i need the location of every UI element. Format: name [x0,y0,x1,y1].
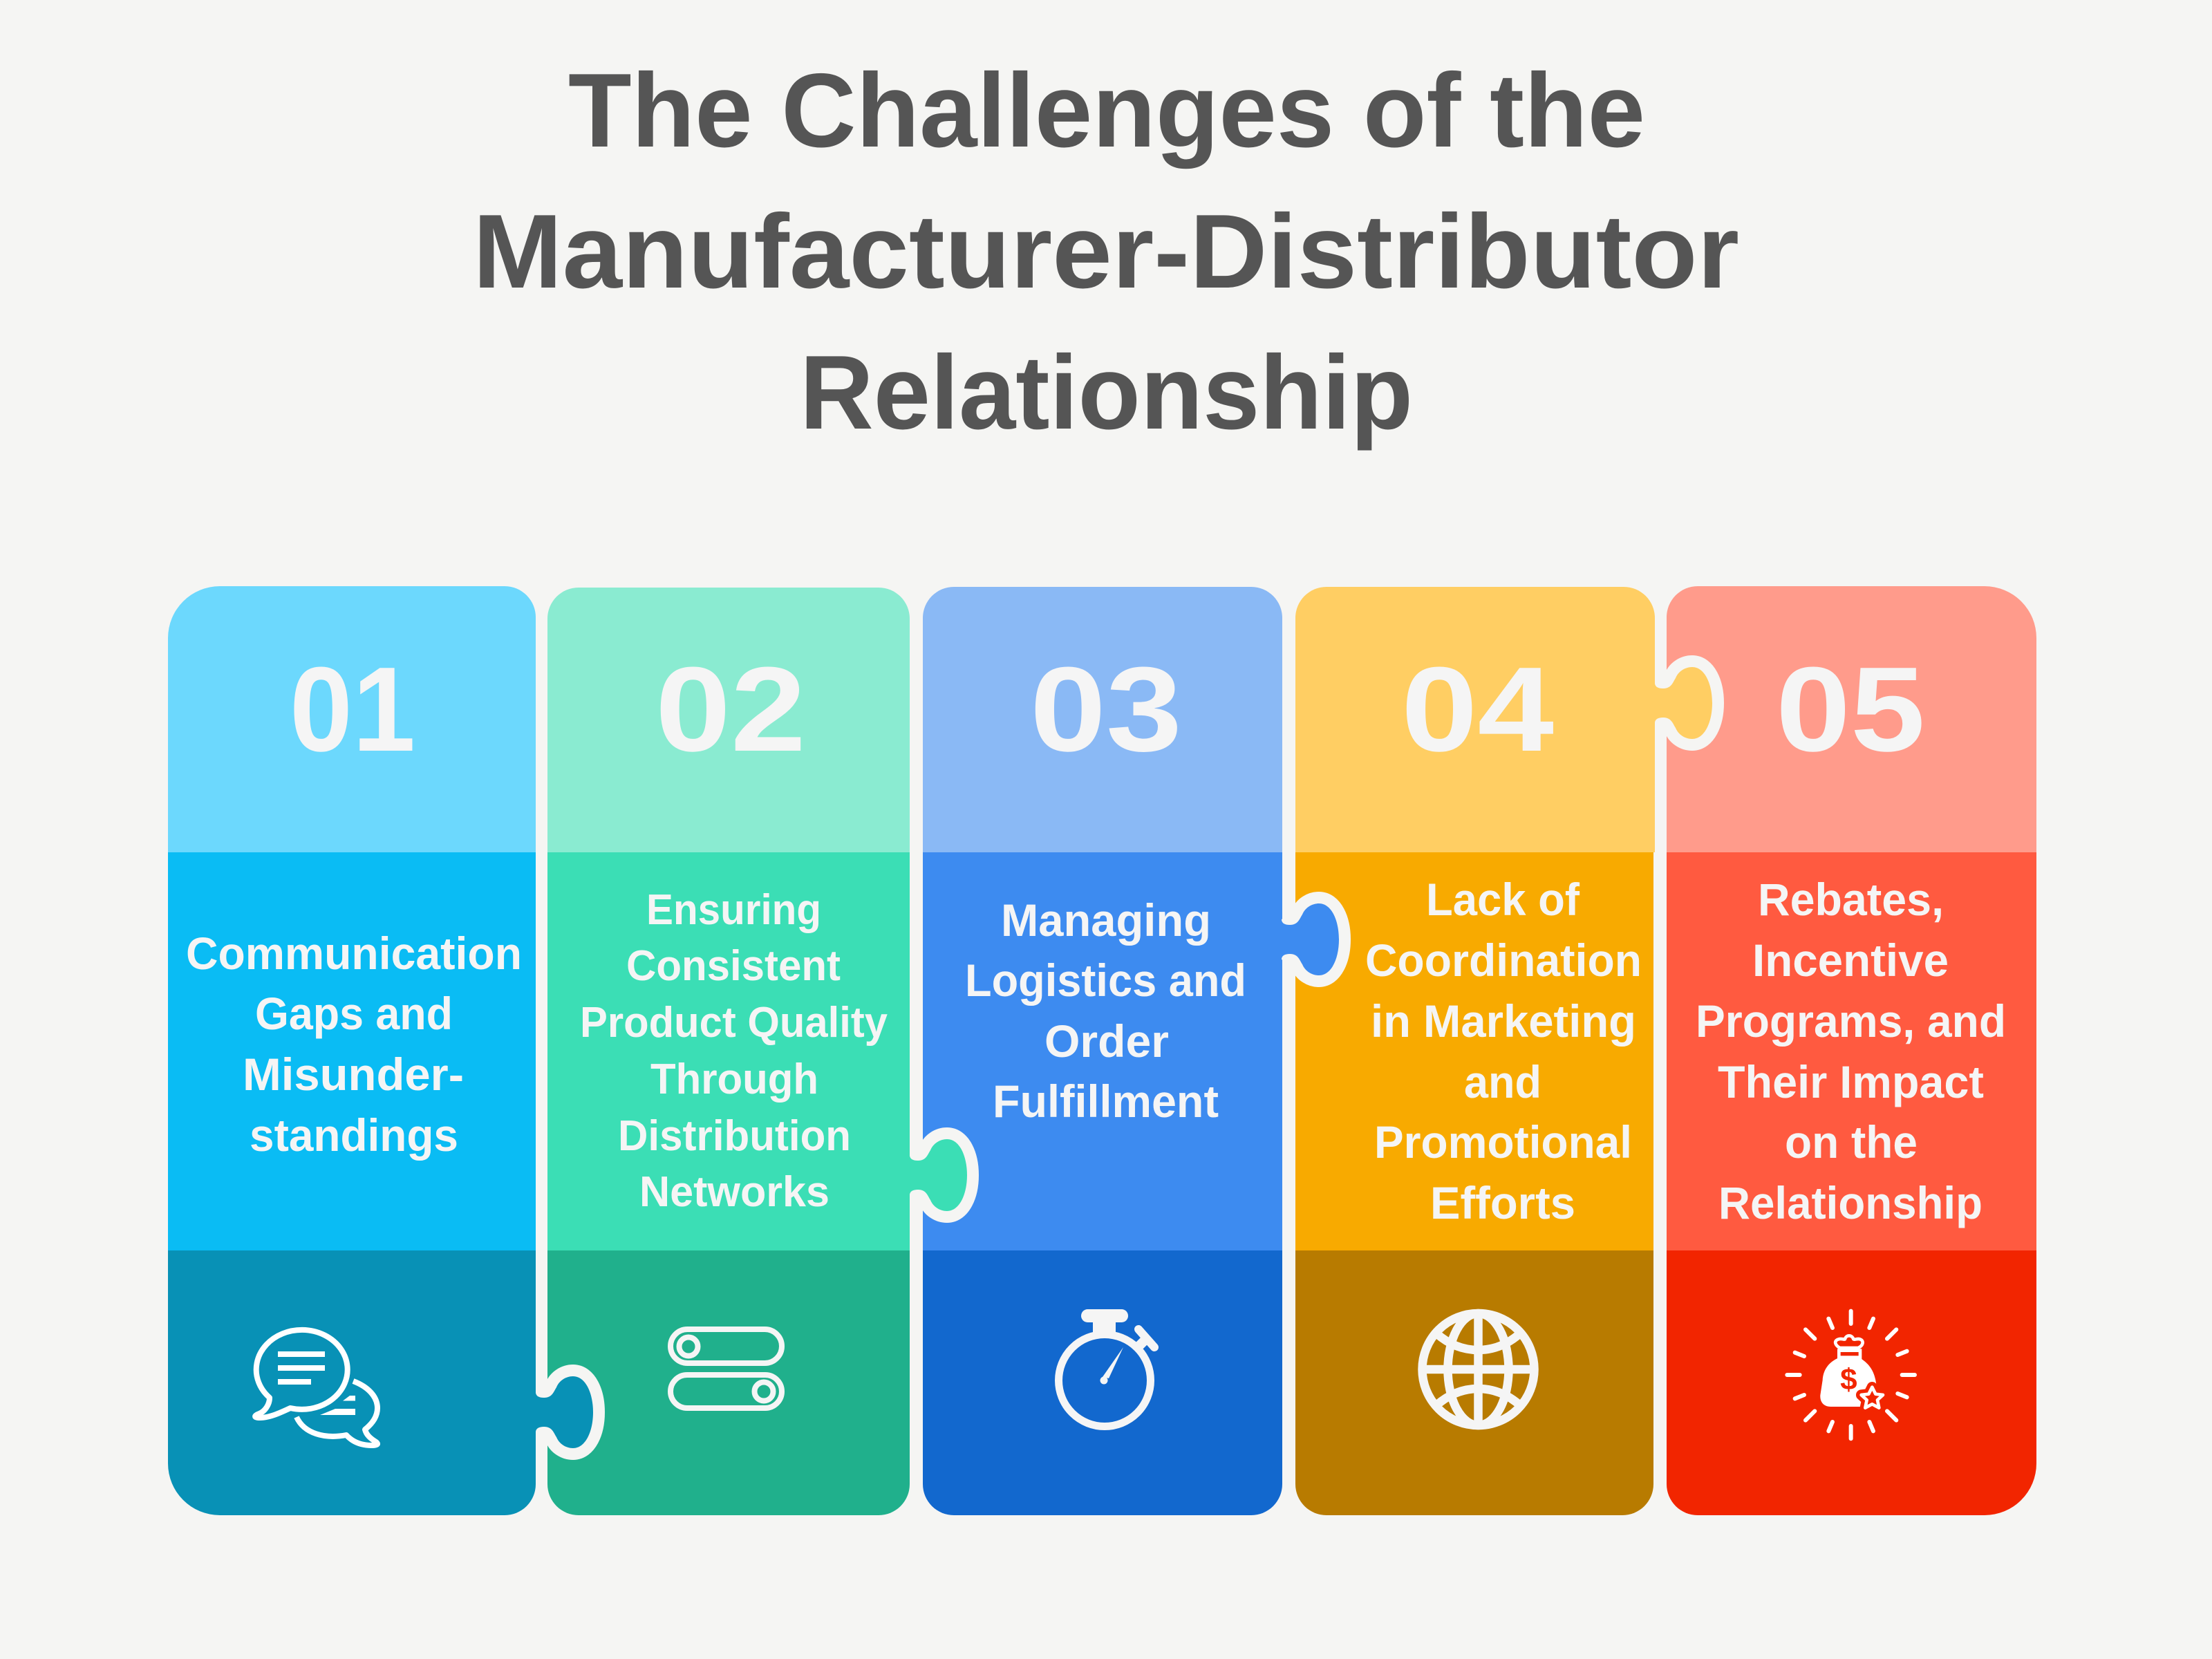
text: logistics: Fulfillment [993,1076,1219,1127]
text: communication gaps: Communication [186,928,522,979]
text: rebates and incentives: Rebates, [1758,874,1944,925]
text: logistics [965,894,1246,1127]
text: marketing coordination: in Marketing [1371,995,1636,1047]
text: product quality: Distribution [618,1112,851,1160]
panel 03: logistics [923,587,1282,1515]
text: product quality: Networks [639,1168,830,1216]
text: rebates and incentives [1696,874,2006,1228]
text: marketing coordination: and [1464,1056,1541,1107]
number 04: 04 [1401,641,1554,776]
panel 05: rebates and incentives [1667,586,2036,1515]
text: product quality: Through [650,1056,818,1103]
text: marketing coordination: Efforts [1430,1177,1575,1228]
number 03: 03 [1030,641,1182,776]
puzzle tab: panel 02 into 03 [910,1139,967,1211]
panel 04: marketing coordination [1295,587,1655,1515]
icon: stopwatch [1059,1309,1154,1427]
text: communication gaps [186,928,522,1161]
icon: money bag with star: $ [1840,1363,1857,1397]
text: rebates and incentives: Programs, and [1696,995,2006,1047]
title: Manufacturer-Distributor [473,193,1739,310]
title [473,52,1739,451]
text: product quality: Ensuring [646,886,821,934]
puzzle tab: panel 03 into 04 [1282,903,1339,975]
icon: globe [1422,1313,1535,1425]
text: rebates and incentives: Their Impact [1718,1056,1984,1107]
text: communication gaps: Misunder- [243,1049,464,1100]
puzzle tab: panel 01 into 02 [536,1376,593,1448]
text: rebates and incentives: on the [1785,1116,1918,1168]
text: product quality: Consistent [626,942,841,990]
text: rebates and incentives: Relationship [1718,1177,1983,1228]
icon: chat bubbles [255,1330,377,1445]
title: The Challenges of the [568,52,1645,169]
text: marketing coordination [1365,874,1642,1228]
text: marketing coordination: Promotional [1374,1116,1632,1168]
number 01: 01 [290,641,415,776]
number 05: 05 [1776,641,1925,776]
text: logistics: Logistics and [965,955,1246,1006]
icon: toggle switches [671,1329,782,1408]
icon: money bag with star [1787,1311,1915,1438]
text: logistics: Managing [1001,894,1211,946]
text: product quality: Product Quality [580,999,888,1047]
number 02: 02 [655,641,806,776]
puzzle tab: panel 04 into 05 [1655,667,1712,739]
panel 02: product quality [547,588,910,1515]
text: marketing coordination: Coordination [1365,935,1642,986]
text: communication gaps: Gaps and [255,988,453,1039]
text: marketing coordination: Lack of [1426,874,1580,925]
panel 01: communication gaps [168,586,536,1515]
text: logistics: Order [1044,1015,1169,1067]
title: Relationship [800,334,1413,451]
text: communication gaps: standings [250,1109,458,1161]
text: product quality [580,886,888,1216]
text: rebates and incentives: Incentive [1752,935,1949,986]
